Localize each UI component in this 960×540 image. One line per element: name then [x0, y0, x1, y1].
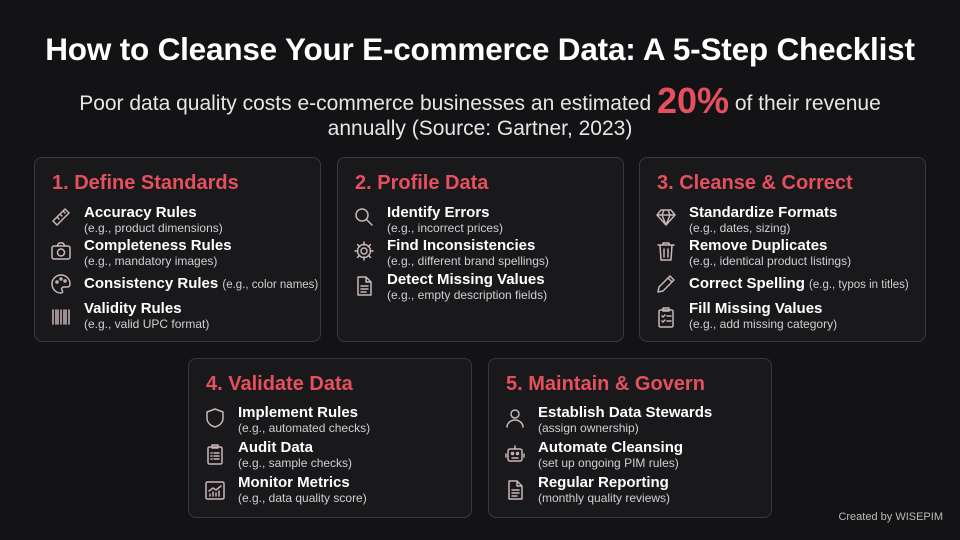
item: spelling: Correct Spelling (e.g., typos in titles) — [689, 275, 909, 292]
item: missing: (e.g., empty description fields) — [387, 288, 547, 302]
item: standardize: (e.g., dates, sizing) — [689, 221, 790, 235]
item: monitor — [238, 474, 367, 505]
item: audit: Audit Data — [238, 439, 313, 456]
item: accuracy — [84, 204, 223, 235]
subtitle — [79, 80, 881, 140]
item: stewards: Establish Data Stewards — [538, 404, 712, 421]
icon: chart — [205, 481, 225, 500]
item: reporting: (monthly quality reviews) — [538, 491, 670, 505]
credit: Created by WISEPIM — [838, 511, 943, 523]
panel: maintain & govern — [488, 358, 772, 518]
icon: camera — [51, 242, 71, 260]
item: duplicates — [689, 237, 851, 268]
panel: profile data — [337, 157, 624, 342]
item: monitor: Monitor Metrics — [238, 474, 350, 491]
item: inconsistencies — [387, 237, 549, 268]
heading: 3. Cleanse & Correct — [657, 172, 853, 194]
item: errors: Identify Errors — [387, 204, 490, 221]
icon: document — [357, 276, 372, 296]
item: standardize: Standardize Formats — [689, 204, 837, 221]
item: automate: Automate Cleansing — [538, 439, 683, 456]
panel: validate data — [188, 358, 472, 518]
item: implement: Implement Rules — [238, 404, 358, 421]
item: accuracy: (e.g., product dimensions) — [84, 221, 223, 235]
item: accuracy: Accuracy Rules — [84, 204, 197, 221]
item: consistency: Consistency Rules (e.g., color names) — [84, 275, 318, 292]
icon: person — [506, 409, 524, 428]
heading: 1. Define Standards — [52, 172, 239, 194]
item: audit: (e.g., sample checks) — [238, 456, 352, 470]
heading: 2. Profile Data — [355, 172, 488, 194]
item: fill missing: (e.g., add missing category) — [689, 317, 837, 331]
icon: search — [355, 208, 373, 226]
item: missing: Detect Missing Values — [387, 271, 545, 288]
item: inconsistencies: Find Inconsistencies — [387, 237, 535, 254]
subtitle: Poor data quality costs e-commerce businesses an estimated 20% of their revenue — [79, 80, 881, 121]
subtitle: annually (Source: Gartner, 2023) — [328, 117, 632, 140]
item: errors — [387, 204, 503, 235]
item: inconsistencies: (e.g., different brand spellings) — [387, 254, 549, 268]
item: stewards: (assign ownership) — [538, 421, 639, 435]
item: validity: Validity Rules — [84, 300, 182, 317]
item: missing — [387, 271, 547, 302]
item: monitor: (e.g., data quality score) — [238, 491, 367, 505]
icon: palette — [51, 274, 71, 294]
icon: pencil — [657, 275, 675, 293]
panel: cleanse & correct — [639, 157, 926, 342]
item: stewards — [538, 404, 712, 435]
item: errors: (e.g., incorrect prices) — [387, 221, 503, 235]
item: fill missing — [689, 300, 837, 331]
icon: barcode — [52, 309, 70, 325]
item: reporting: Regular Reporting — [538, 474, 669, 491]
item: standardize — [689, 204, 837, 235]
icon: clipboard list — [207, 444, 223, 465]
item: automate — [538, 439, 683, 470]
item: duplicates: Remove Duplicates — [689, 237, 827, 254]
item: audit — [238, 439, 352, 470]
heading: 4. Validate Data — [206, 373, 353, 395]
item: duplicates: (e.g., identical product listings) — [689, 254, 851, 268]
heading: 5. Maintain & Govern — [506, 373, 705, 395]
item: completeness: (e.g., mandatory images) — [84, 254, 217, 268]
panel: define standards — [34, 157, 321, 342]
item: validity: (e.g., valid UPC format) — [84, 317, 209, 331]
icon: gear — [354, 241, 374, 261]
item: completeness — [84, 237, 232, 268]
item: fill missing: Fill Missing Values — [689, 300, 822, 317]
item: validity — [84, 300, 209, 331]
icon: report — [508, 480, 523, 500]
icon: robot — [505, 445, 525, 462]
icon: clipboard check — [658, 307, 674, 328]
icon: shield — [206, 408, 224, 428]
item: completeness: Completeness Rules — [84, 237, 232, 254]
item: implement — [238, 404, 370, 435]
icon: diamond — [656, 209, 676, 226]
item: reporting — [538, 474, 670, 505]
item: implement: (e.g., automated checks) — [238, 421, 370, 435]
title: How to Cleanse Your E-commerce Data: A 5-Step Checklist — [45, 31, 915, 67]
item: automate: (set up ongoing PIM rules) — [538, 456, 679, 470]
icon: trash — [657, 242, 675, 261]
icon: ruler — [52, 208, 70, 226]
